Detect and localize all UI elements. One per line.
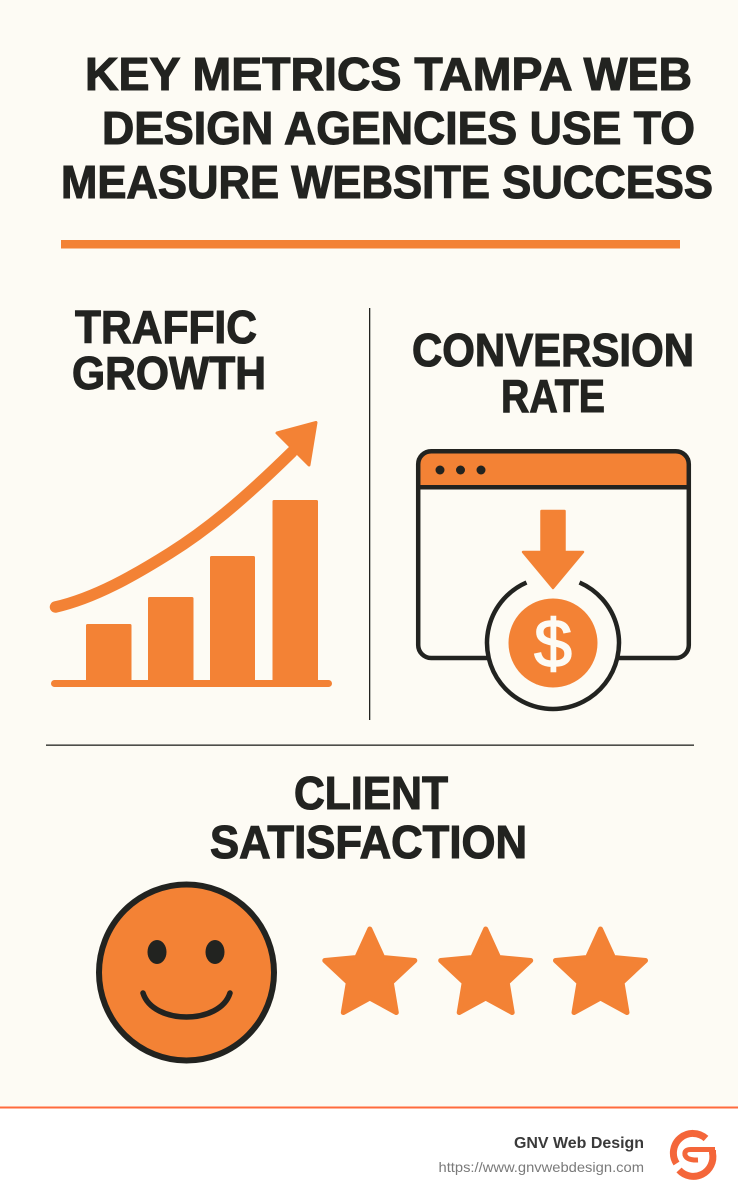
icon: GNV logo bbox=[673, 1133, 715, 1176]
footer brand name: GNV Web Design bbox=[514, 1135, 644, 1152]
icon: smiley face bbox=[99, 884, 274, 1060]
icon: three stars bbox=[325, 929, 646, 1012]
heading: conversion rate bbox=[412, 324, 694, 422]
title: MEASURE WEBSITE SUCCESS bbox=[61, 156, 713, 208]
heading: traffic growth: TRAFFIC bbox=[75, 301, 257, 353]
footer band bbox=[0, 1106, 738, 1200]
heading: client satisfaction: CLIENT bbox=[294, 767, 448, 819]
heading: client satisfaction: SATISFACTION bbox=[210, 816, 527, 868]
icon: browser window with dollar coin: $ bbox=[534, 606, 572, 682]
icon: traffic growth bar chart with arrow bbox=[51, 422, 332, 687]
heading: conversion rate: CONVERSION bbox=[412, 324, 694, 376]
title: KEY METRICS TAMPA WEB bbox=[85, 48, 692, 100]
title underline bar bbox=[61, 240, 680, 248]
title bbox=[61, 48, 713, 208]
heading: conversion rate: RATE bbox=[501, 370, 605, 422]
title: DESIGN AGENCIES USE TO bbox=[102, 102, 695, 154]
heading: client satisfaction bbox=[210, 767, 527, 868]
icon: browser window with dollar coin bbox=[418, 451, 689, 709]
footer url: https://www.gnvwebdesign.com bbox=[438, 1159, 644, 1175]
heading: traffic growth bbox=[72, 301, 266, 399]
heading: traffic growth: GROWTH bbox=[72, 347, 266, 399]
